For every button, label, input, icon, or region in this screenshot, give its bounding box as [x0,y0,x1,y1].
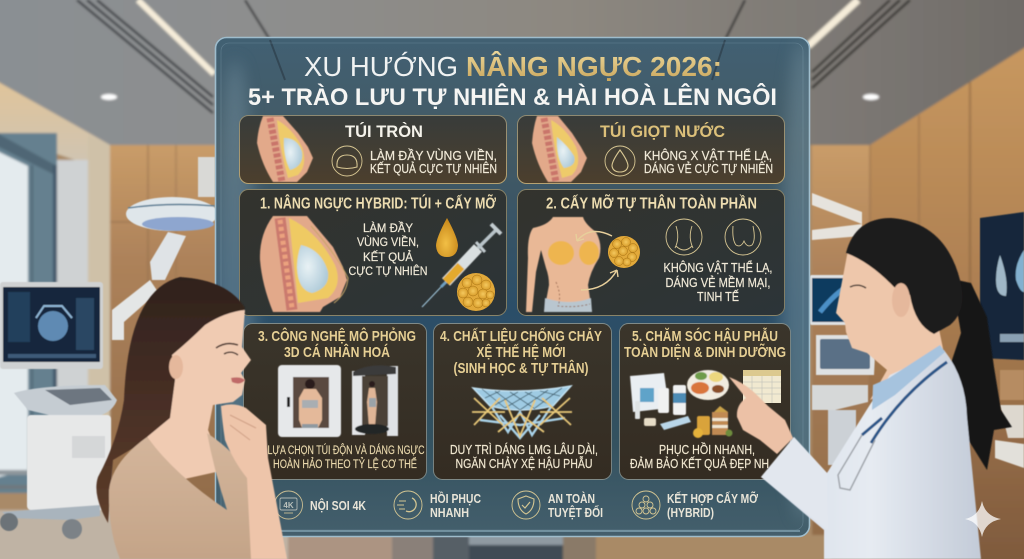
card 5: post-op care [620,324,790,480]
left monitor and ultrasound cart [0,282,117,539]
watermark sparkle [965,501,1001,537]
surgical lamp [112,157,218,340]
card 3: 3D simulation [244,324,426,480]
card text: KHÔNG X VẬT THỂ LẠ, [644,148,772,163]
arrows: fat transfer [576,232,618,290]
card: túi giọt nước [518,116,784,184]
icon: drinks and snacks [693,406,732,438]
card heading: 4. CHẤT LIỆU CHỐNG CHẢY [440,327,602,345]
illustration: mesh [472,386,572,438]
benefit label: NỘI SOI 4K [310,498,366,513]
icon: food plate [687,370,729,400]
card heading: 3. CÔNG NGHỆ MÔ PHỎNG [258,327,416,345]
illustration: torso [526,217,600,312]
card text [450,442,598,471]
card heading: 1. NÂNG NGỰC HYBRID: TÚI + CẤY MỠ [260,194,497,212]
benefit label: (HYBRID) [667,505,714,520]
stethoscope [862,362,947,443]
card text [268,442,425,471]
right wall equipment [810,193,1024,468]
illustration: teardrop implant cross-section [532,116,587,182]
icon: round implant [332,146,362,176]
doctor in white coat [729,218,1012,559]
glass panel [215,37,822,540]
sweater [109,433,257,559]
card text: DÁNG VẺ MỀM MẠI, [666,275,770,290]
card text: KẾT QUẢ CỰC TỰ NHIÊN [370,161,497,176]
icon: 4K monitor: 4K [283,501,294,510]
white coat [761,350,981,559]
card text: CỰC TỰ NHIÊN [348,263,428,278]
benefit label [667,491,759,520]
benefit label [430,491,481,520]
card text [370,148,497,176]
title line 1 [304,51,722,82]
benefit: hồi phục nhanh [394,491,481,520]
card heading: TOÀN DIỆN & DINH DƯỠNG [624,343,786,361]
benefit: kết hợp cấy mỡ [632,491,759,520]
card text [644,148,773,176]
benefit label: HỒI PHỤC [430,491,481,506]
card 4: anti-sag material [434,324,612,480]
card text: VÙNG VIỀN, [357,234,419,249]
icon: syringe [422,224,501,307]
card heading [440,327,602,377]
card heading: 2. CẤY MỠ TỰ THÂN TOÀN PHẦN [546,194,757,212]
benefit label: NHANH [430,505,469,520]
benefit label: AN TOÀN [548,491,595,506]
illustration: simulation booths [278,365,398,437]
card text: KHÔNG VẬT THỂ LẠ, [664,260,772,275]
woman in beige sweater [96,277,287,559]
hair [96,277,245,523]
card text [630,442,769,471]
face and neck [147,310,251,480]
icon: waist [666,219,702,255]
card text: DÁNG VẺ CỰC TỰ NHIÊN [644,161,773,176]
icon: fat cluster [632,491,660,519]
card heading: XỆ THẾ HỆ MỚI [476,343,566,361]
title [248,51,777,111]
arm and hand [221,404,287,559]
illustration: hybrid cross-section [260,216,348,312]
card text: DUY TRÌ DÁNG LMG LÂU DÀI, [450,442,598,457]
icon: breast contour [725,219,761,255]
card text: NGĂN CHẢY XỆ HẬU PHẪU [456,456,592,471]
card 1: hybrid [240,190,506,316]
card text: LÀM ĐẦY [363,220,413,235]
icon: calendar [743,370,781,403]
illustration: round implant cross-section [257,116,313,182]
card heading: 3D CÁ NHÂN HOÁ [284,343,390,361]
title line 2: 5+ TRÀO LƯU TỰ NHIÊN & HÀI HOÀ LÊN NGÔI [248,83,777,111]
card 2: autologous fat [518,190,784,316]
card text: KẾT QUẢ [363,249,414,264]
ponytail [951,280,1012,470]
icon: fast recovery [394,491,422,519]
card text: ĐẢM BẢO KẾT QUẢ ĐẸP NH [630,456,769,471]
title line 1: NÂNG NGỰC 2026: [466,51,722,82]
card text: LỰA CHỌN TÚI ĐỘN VÀ DÁNG NGỰC [268,442,425,457]
blue collar [872,345,945,410]
pointing hand [729,377,793,454]
benefit label [548,491,603,520]
card: túi tròn [240,116,506,184]
card heading: (SINH HỌC & TỰ THÂN) [454,359,588,377]
card heading: TÚI TRÒN [345,122,423,141]
card text: TINH TẾ [697,289,739,304]
icon: oil drop [436,218,458,257]
card heading [624,327,786,361]
face and neck [836,250,945,400]
card text: HOÀN HẢO THEO TỶ LỆ CƠ THỂ [273,456,417,471]
card heading: TÚI GIỌT NƯỚC [600,122,725,141]
card text: LÀM ĐẦY VÙNG VIỀN, [370,148,497,163]
icon: medicine box and bottles [630,373,691,430]
card text [348,220,428,278]
benefit label: KẾT HỢP CẤY MỠ [667,491,759,506]
card heading: 5. CHĂM SÓC HẬU PHẪU [632,327,778,345]
benefit: an toàn tuyệt đối [512,491,603,520]
benefit label: TUYỆT ĐỐI [548,505,603,520]
benefit: nội soi 4K [274,491,366,519]
icon: fat cells [608,236,640,268]
hair [846,218,962,334]
card text [664,260,772,304]
card text: PHỤC HỒI NHANH, [659,442,755,457]
title line 1: XU HƯỚNG [304,51,458,82]
card heading [258,327,416,361]
icon: fat cells [457,273,495,311]
icon: teardrop [605,146,635,176]
icon: shield [512,491,540,519]
